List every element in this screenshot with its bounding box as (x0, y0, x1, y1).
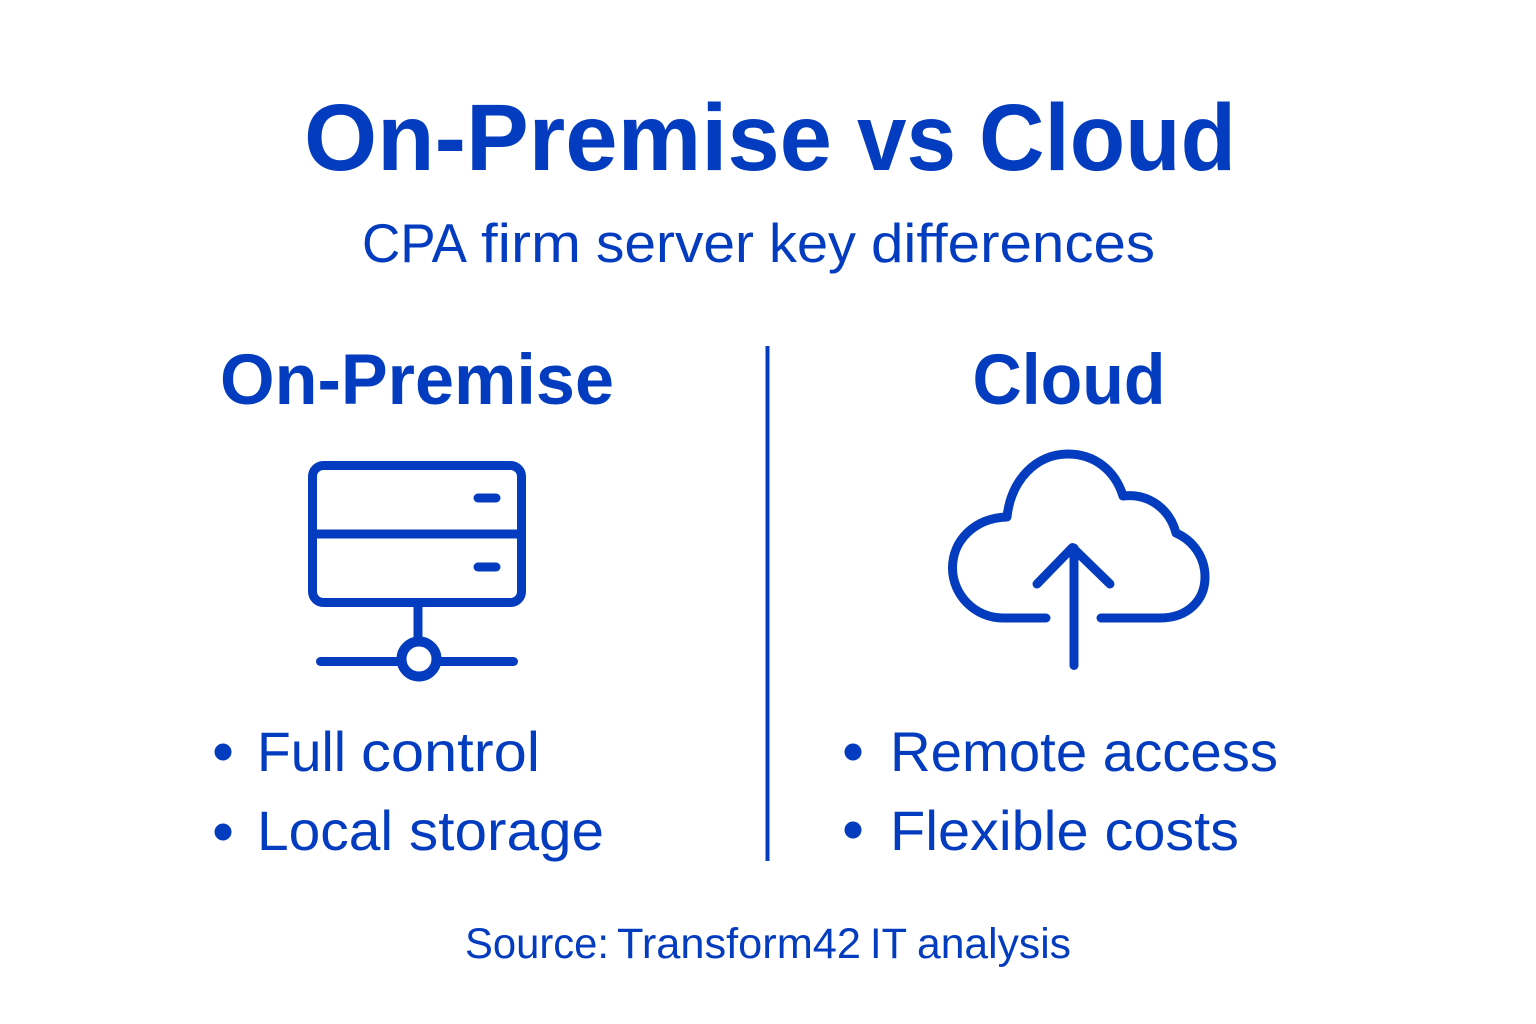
left bullet list (214, 720, 604, 862)
title: vs (857, 85, 956, 191)
divider line (766, 346, 770, 861)
source note: IT (870, 920, 907, 968)
subtitle: differences (871, 212, 1155, 274)
title (304, 85, 1236, 191)
left bullet list: Full (257, 720, 346, 783)
source note: analysis (917, 920, 1071, 968)
heading: on-premise: On-Premise (220, 341, 614, 420)
subtitle: CPA (362, 212, 467, 274)
source note (465, 920, 1071, 968)
subtitle (362, 212, 1155, 274)
subtitle: key (769, 212, 857, 274)
source note: Transform42 (617, 920, 861, 968)
right bullet list (844, 720, 1278, 862)
title: Cloud (979, 85, 1236, 191)
subtitle: server (596, 212, 754, 274)
heading: cloud: Cloud (972, 341, 1166, 420)
subtitle: firm (481, 212, 581, 274)
icon: cloud upload (952, 454, 1205, 666)
left bullet list: control (361, 720, 540, 783)
icon: server (312, 466, 522, 676)
source note: Source: (465, 920, 609, 968)
right bullet list: Flexible costs (890, 799, 1239, 862)
left bullet list: Local (257, 799, 393, 862)
title: On-Premise (304, 85, 832, 191)
right bullet list: Remote access (890, 720, 1278, 783)
left bullet list: storage (409, 799, 604, 862)
